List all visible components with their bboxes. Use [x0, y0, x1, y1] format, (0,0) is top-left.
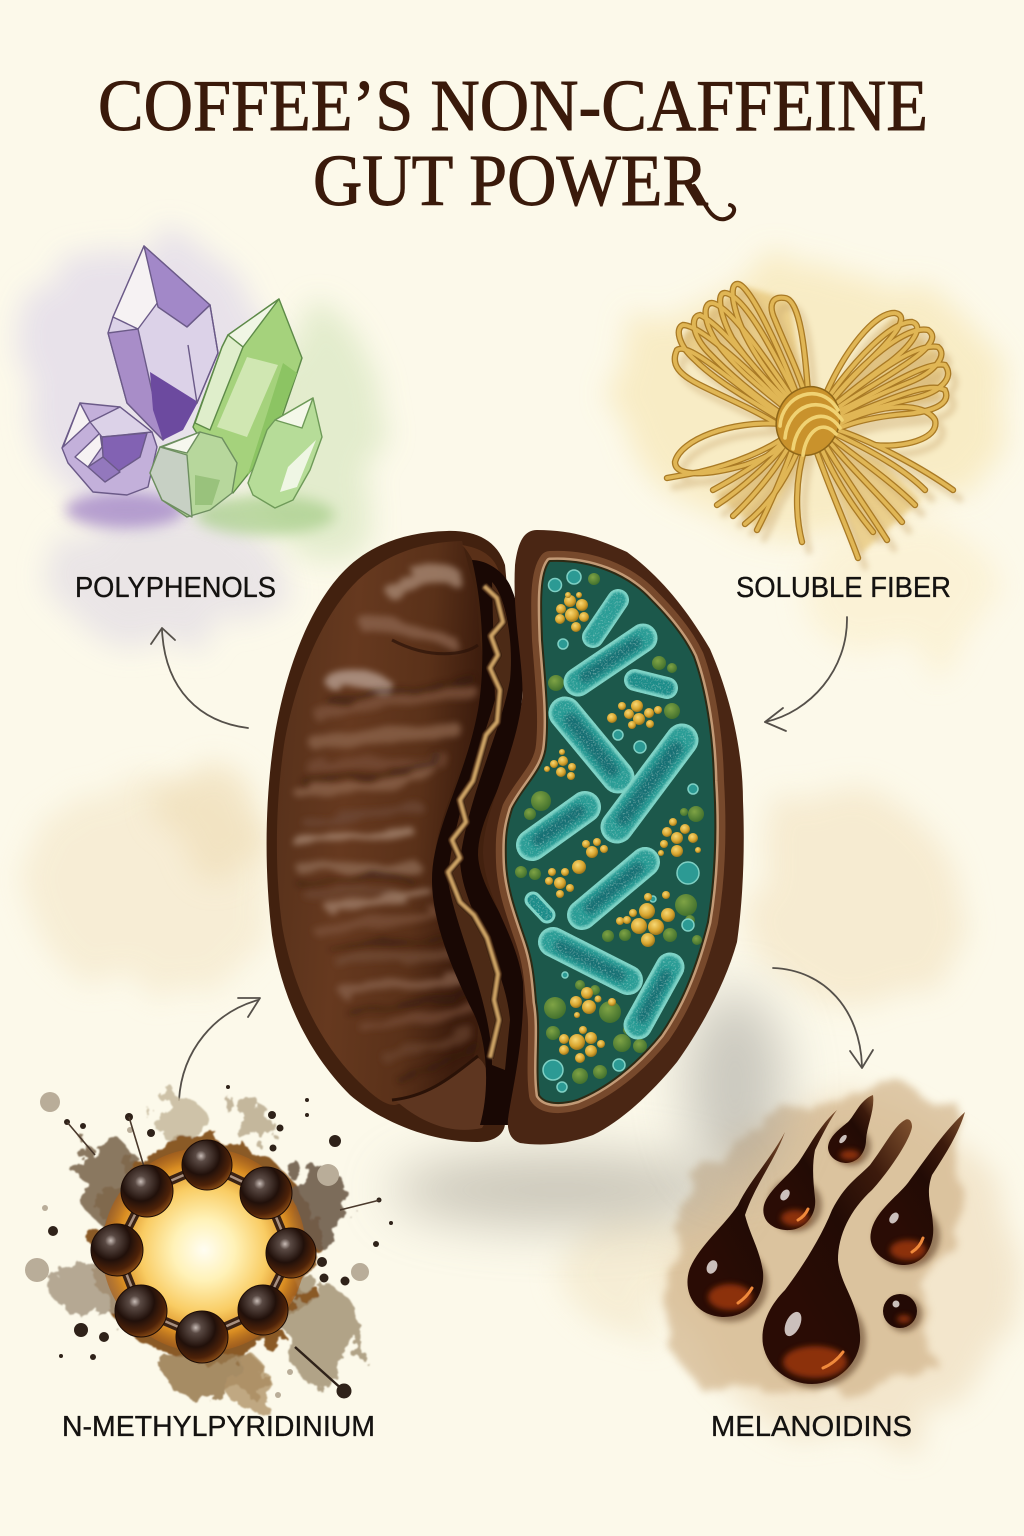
teal rings	[543, 570, 699, 1092]
label: n-methylpyridinium: N-METHYLPYRIDINIUM	[62, 1411, 375, 1443]
arrow: bean to melanoidins	[773, 968, 873, 1068]
molecular ring bonds	[117, 1165, 291, 1337]
icon: melanoidin drops	[687, 1095, 965, 1388]
ember reflections	[708, 1150, 926, 1378]
title	[98, 65, 928, 221]
fiber knot	[765, 376, 851, 466]
gold clusters	[544, 592, 701, 1063]
arrow: soluble fiber to bean	[765, 617, 847, 731]
small green crystal	[150, 432, 237, 517]
bond highlights	[117, 1165, 291, 1337]
icon: polyphenol crystals	[62, 246, 335, 535]
label: melanoidins: MELANOIDINS	[711, 1411, 912, 1443]
right half cross-section	[483, 530, 744, 1144]
left half of bean	[267, 531, 512, 1142]
watercolor washes	[25, 235, 1020, 1440]
right green crystal	[248, 398, 322, 508]
title: GUT POWER	[313, 140, 708, 221]
drop shadows	[692, 1126, 940, 1388]
green vesicles	[515, 573, 704, 1084]
atoms	[91, 1140, 316, 1363]
arrow: bean to polyphenols	[151, 628, 248, 728]
ink splatter	[53, 1096, 358, 1413]
teal bacteria	[532, 600, 682, 1025]
arrow: n-methylpyridinium to bean	[179, 998, 260, 1100]
label: polyphenols: POLYPHENOLS	[75, 572, 276, 604]
title: COFFEE’S NON-CAFFEINE	[98, 65, 928, 146]
small purple crystal	[62, 403, 157, 495]
glowing core	[102, 1148, 306, 1352]
label: soluble fiber: SOLUBLE FIBER	[736, 572, 951, 604]
icon: soluble fiber bundle	[667, 284, 960, 567]
drop highlights	[705, 1134, 901, 1339]
central coffee bean	[267, 530, 744, 1144]
green crystal	[193, 299, 302, 493]
icon: n-methylpyridinium molecule splash	[25, 1085, 393, 1413]
lobe highlights	[298, 572, 470, 1057]
big purple crystal	[108, 246, 218, 440]
center crease with golden squiggle	[432, 560, 525, 1125]
